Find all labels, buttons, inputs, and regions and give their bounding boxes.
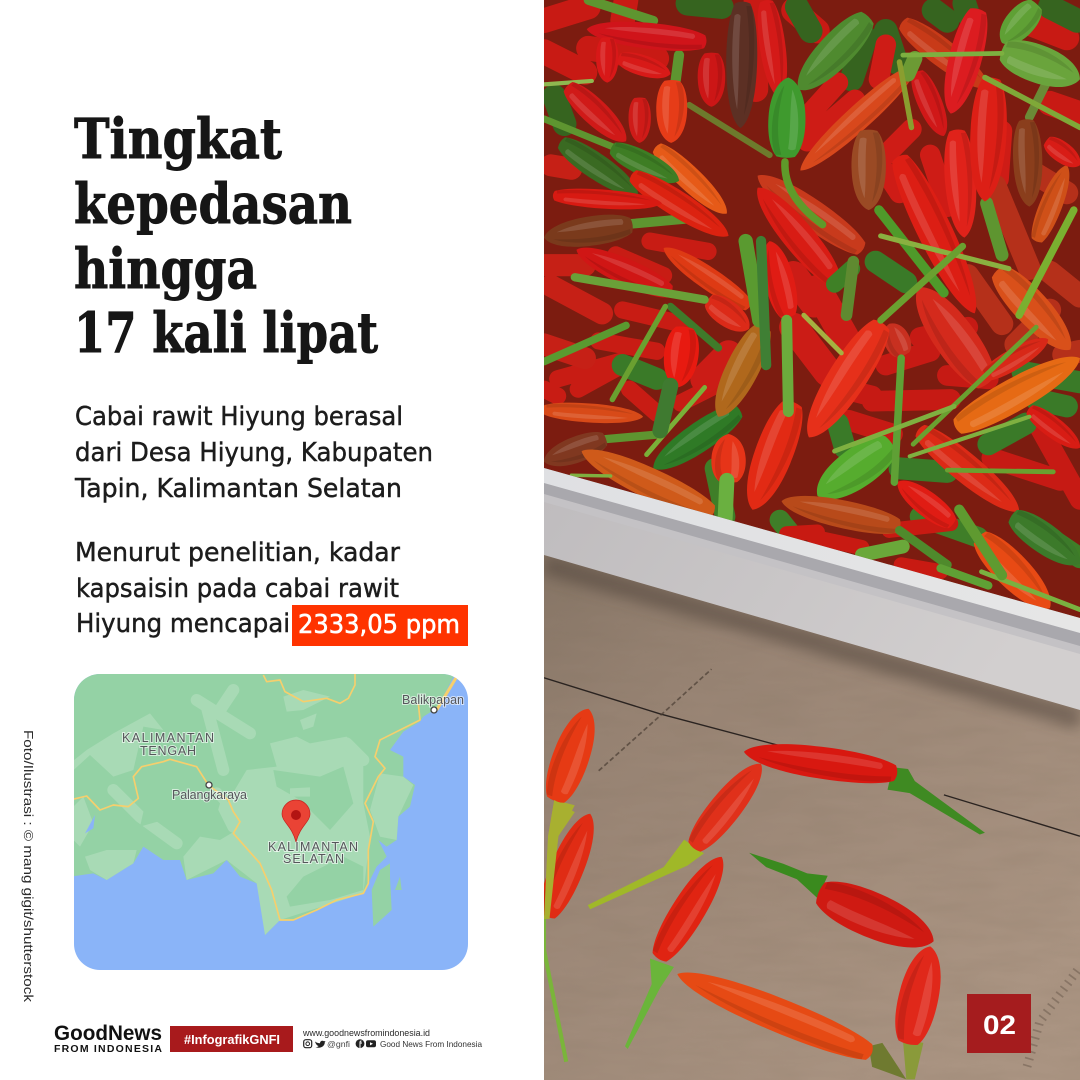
- darker forest patches: [140, 767, 363, 907]
- logo: GoodNews From Indonesia: FROM INDONESIA: [54, 1043, 162, 1055]
- map label: Kalimantan Tengah: KALIMANTAN: [122, 731, 214, 745]
- main chili bodies: [725, 1, 758, 128]
- paragraph: capsaicin level: kapsaisin pada cabai rawit: [76, 574, 399, 604]
- loose chili pepper 2: [544, 800, 594, 1062]
- white left panel: [0, 0, 544, 1080]
- hashtag badge: #InfografikGNFI: [184, 1033, 280, 1047]
- map label: Palangkaraya: Palangkaraya: [172, 788, 247, 802]
- loose chili pepper 8: [677, 972, 906, 1080]
- paragraph: capsaicin level: [75, 538, 401, 639]
- website and social handles: @gnfi: [327, 1039, 350, 1049]
- stems behind: [544, 0, 1046, 439]
- metal tray: [544, 468, 1080, 710]
- chili pile inside tray: [540, 0, 1080, 630]
- website and social handles: www.goodnewsfromindonesia.id: [302, 1028, 430, 1038]
- page number badge: [967, 994, 1031, 1053]
- title: 17 kali lipat: [74, 300, 378, 365]
- map label: Kalimantan Selatan: KALIMANTAN: [268, 840, 358, 854]
- hashtag badge: [170, 1026, 293, 1052]
- title: hingga: [74, 236, 257, 301]
- icon: facebook: [356, 1039, 364, 1048]
- land: [70, 670, 457, 935]
- background chilies: [544, 0, 1080, 572]
- photo credit: Foto/Ilustrasi : © mang gigit/shutterstock: [21, 730, 36, 1003]
- title: [74, 106, 378, 365]
- title: kepedasan: [74, 171, 352, 236]
- icon: instagram: [304, 1040, 312, 1048]
- highlight: ppm value: 2333,05 ppm: [298, 610, 460, 640]
- page number badge: 02: [983, 1010, 1016, 1040]
- paragraph: origin: Cabai rawit Hiyung berasal: [75, 402, 403, 432]
- foreground stems: [544, 53, 1080, 610]
- map of South Kalimantan: [70, 670, 468, 970]
- logo: GoodNews From Indonesia: GoodNews: [54, 1022, 162, 1045]
- paragraph: capsaicin level: Menurut penelitian, kadar: [75, 538, 401, 568]
- website and social handles: Good News From Indonesia: [380, 1039, 482, 1049]
- map label: Palangkaraya: [172, 782, 247, 802]
- icon: twitter: [315, 1041, 326, 1048]
- map label: Kalimantan Tengah: TENGAH: [140, 744, 196, 758]
- paragraph: origin: [74, 402, 433, 504]
- paragraph: capsaicin level: Hiyung mencapai: [76, 609, 290, 639]
- wooden table surface: [544, 460, 1080, 1080]
- loose chili pepper 3: [588, 764, 762, 910]
- logo: GoodNews From Indonesia: [54, 1022, 162, 1055]
- loose chili pepper 6: [749, 852, 934, 948]
- province borders: [70, 673, 457, 920]
- map label: Balikpapan: Balikpapan: [402, 693, 464, 707]
- paragraph: origin: Tapin, Kalimantan Selatan: [74, 474, 402, 504]
- website and social handles: [302, 1028, 482, 1049]
- loose chili pepper 1: [544, 708, 595, 919]
- paragraph: origin: dari Desa Hiyung, Kabupaten: [75, 438, 433, 468]
- icon: map pin: [282, 800, 310, 842]
- lighter land: [70, 690, 413, 935]
- loose chili pepper 7: [895, 946, 941, 1080]
- title: Tingkat: [74, 106, 283, 171]
- map label: Kalimantan Selatan: [268, 840, 358, 866]
- map label: Kalimantan Tengah: [122, 731, 214, 758]
- loose chili pepper 4: [742, 736, 985, 834]
- map label: Balikpapan: [402, 693, 464, 713]
- icon: youtube: [366, 1040, 376, 1047]
- photo: chili peppers on tray and wood table: [532, 0, 1080, 1080]
- map label: Kalimantan Selatan: SELATAN: [283, 852, 344, 866]
- loose chili pepper 5: [625, 856, 724, 1049]
